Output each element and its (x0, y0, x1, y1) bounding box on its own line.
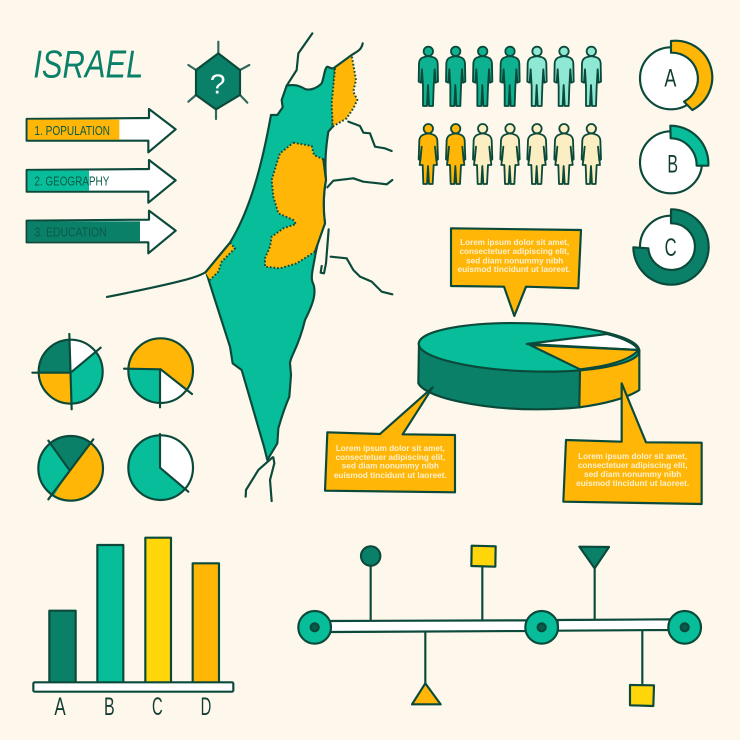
map: eastern region (332, 55, 357, 127)
callout: left (325, 387, 455, 492)
people: female row (419, 124, 601, 184)
small pie 4 (128, 434, 193, 500)
bar labels: A (54, 694, 66, 721)
bar labels: D (201, 694, 211, 721)
pie: orange side (579, 350, 639, 407)
bar A (49, 611, 76, 683)
pie: dark side (418, 343, 580, 409)
donut chart B (640, 126, 708, 193)
arrow: education: 3. EDUCATION (34, 225, 107, 240)
callout: right: euismod tincidunt ut laoreet. (576, 478, 689, 488)
donut chart A (640, 41, 712, 110)
arrow: population: 1. POPULATION (34, 123, 110, 138)
map: central region (265, 143, 326, 268)
callout: right (563, 383, 702, 504)
title: ISRAEL (33, 43, 143, 86)
callout: top (451, 228, 581, 316)
arrow: geography: 2. GEOGRAPHY (34, 174, 109, 189)
arrow: education (27, 211, 176, 253)
callout: top: euismod tincidunt ut laoreet. (457, 264, 570, 274)
timeline: stems (371, 565, 642, 685)
callout: top: consectetuer adipiscing elit, (459, 246, 569, 256)
donut chart C: C (665, 235, 677, 262)
pie: white slice (527, 334, 639, 350)
bar D (193, 563, 219, 683)
icon: question hexagon (188, 42, 249, 119)
callout: left: Lorem ipsum dolor sit amet, (336, 443, 445, 453)
bar labels: C (152, 694, 163, 721)
map: neighbouring borders (107, 33, 392, 501)
callout: right: Lorem ipsum dolor sit amet, (578, 451, 687, 461)
arrow: geography (27, 160, 176, 203)
map: dashed borders (210, 55, 357, 280)
timeline: bars (330, 619, 670, 632)
callout: right: consectetuer adipiscing elit, (578, 460, 687, 470)
bar C (145, 538, 171, 683)
marker: bottom square (630, 685, 654, 706)
map: main territory (206, 67, 335, 460)
people: male row (419, 47, 601, 106)
bar chart (33, 538, 233, 721)
marker: down triangle (579, 547, 609, 568)
small pie 1 (32, 334, 103, 409)
pie: orange slice (530, 345, 639, 369)
small pie 2 (124, 338, 193, 407)
bar B (97, 545, 123, 683)
small pie 3 (38, 436, 103, 501)
donut chart B: B (667, 152, 678, 179)
bar baseline (33, 682, 233, 692)
timeline (298, 546, 701, 706)
bar labels: B (104, 694, 115, 721)
callout: left: consectetuer adipiscing elit, (335, 452, 445, 462)
icon: question hexagon: ? (210, 68, 225, 99)
donut chart C (633, 209, 709, 285)
marker: top square (471, 546, 496, 567)
callout: top: Lorem ipsum dolor sit amet, (460, 237, 569, 247)
bar labels (54, 694, 211, 721)
map: coastal strip (205, 243, 235, 280)
callout: left: sed diam nonummy nibh (342, 461, 439, 471)
callout: top: sed diam nonummy nibh (466, 255, 563, 265)
callout: right: sed diam nonummy nibh (584, 469, 681, 479)
map of Israel (107, 33, 392, 501)
marker: up triangle (412, 683, 441, 704)
donut chart A: A (664, 66, 677, 93)
marker: circle (361, 546, 380, 566)
arrow: population (27, 109, 176, 152)
timeline: nodes (298, 611, 701, 644)
pie: top (418, 320, 640, 375)
3D pie chart (418, 320, 640, 409)
callout: left: euismod tincidunt ut laoreet. (334, 470, 447, 480)
